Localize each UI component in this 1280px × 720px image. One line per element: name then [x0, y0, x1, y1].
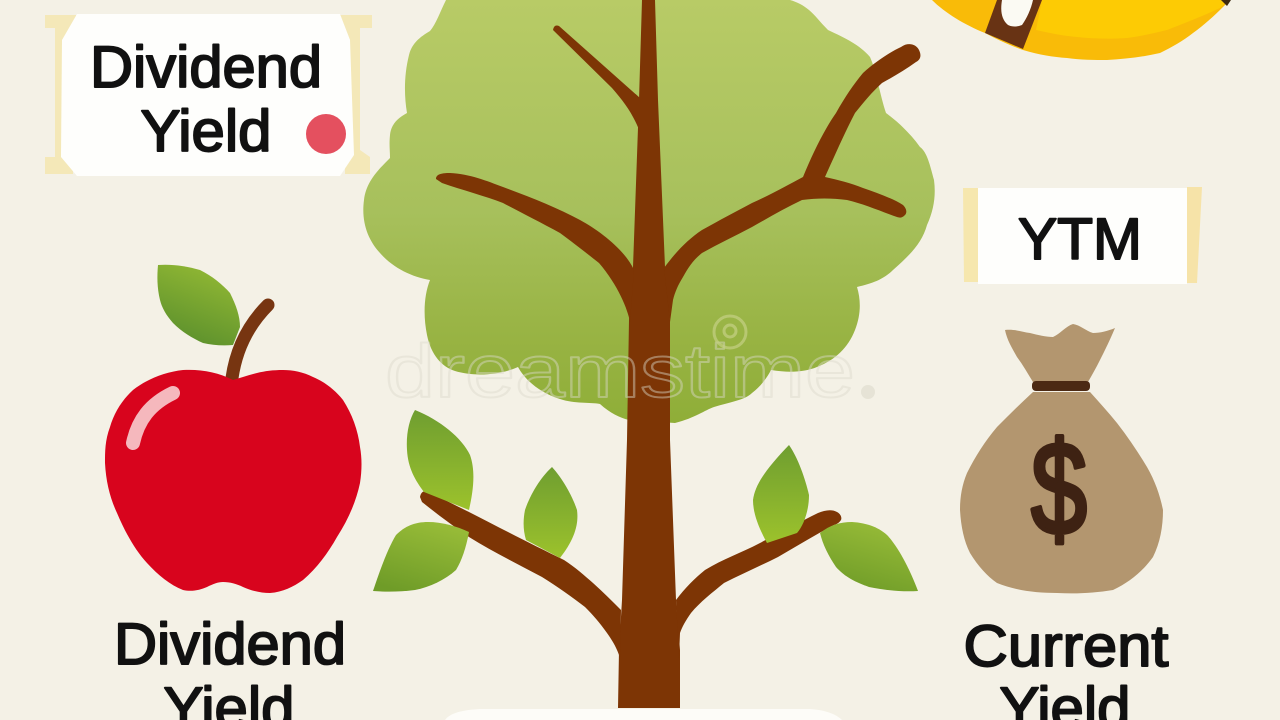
icon: money bag [960, 324, 1163, 593]
tree canopy [363, 0, 935, 423]
caption: Current Yield [964, 614, 1168, 720]
panel: Dividend Yield label top left [45, 14, 372, 176]
tree trunk and branches [420, 0, 920, 708]
watermark [385, 316, 875, 413]
scroll frame [45, 15, 372, 174]
caption: Current Yield: Current [964, 614, 1168, 679]
illustration: tree [363, 0, 935, 708]
bag body [960, 392, 1163, 593]
apple highlight [133, 393, 173, 443]
caption: Dividend Yield [114, 612, 346, 720]
apple leaf [157, 265, 240, 345]
lower leaves [373, 410, 918, 592]
label text: Dividend [90, 35, 322, 100]
bottom label panel [445, 709, 842, 720]
panel: YTM label [963, 187, 1202, 284]
icon: hard hat top right [932, 0, 1231, 60]
icon: red apple [105, 265, 362, 593]
watermark: dreamstime [385, 329, 855, 413]
label text: YTM [1018, 207, 1142, 272]
panel: Dividend Yield label top left: Yield [140, 99, 272, 164]
apple body [105, 370, 362, 593]
caption: Dividend Yield: Dividend [114, 612, 346, 677]
label background [978, 188, 1187, 284]
apple stem [232, 305, 268, 378]
dollar sign: $ [1031, 415, 1087, 562]
label background [61, 14, 354, 176]
bag neck [1005, 324, 1115, 382]
scroll frame [963, 188, 978, 282]
bag tie [1032, 381, 1090, 391]
red dot [306, 114, 346, 154]
